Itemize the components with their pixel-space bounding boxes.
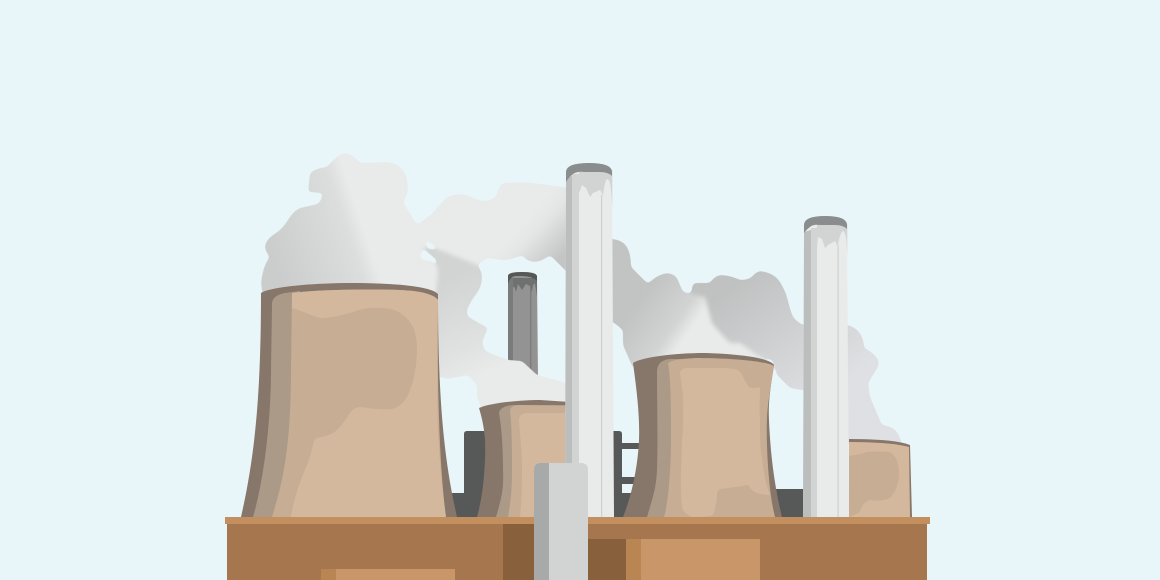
- door, right: [626, 539, 760, 580]
- smoke plumes: [261, 153, 902, 446]
- small cooling tower, right: [849, 439, 912, 517]
- smoke: big tower plume: [261, 153, 438, 298]
- foreground pillar: [534, 463, 588, 580]
- smoke: right plume between chimneys: [690, 271, 902, 446]
- small cooling tower, left: [477, 400, 570, 517]
- small dark chimney: [508, 272, 538, 380]
- smoke: rear plume behind small tower: [422, 248, 567, 412]
- medium cooling tower: [623, 353, 782, 517]
- smoke: plume above medium tower: [605, 237, 776, 368]
- door, left: [321, 569, 455, 580]
- large cooling tower: [241, 283, 457, 517]
- platform building: [225, 517, 930, 580]
- smoke: upper plume into chimney: [417, 182, 570, 275]
- dark buildings behind towers: [452, 431, 804, 517]
- first tall chimney: [565, 163, 614, 517]
- second tall chimney: [803, 216, 849, 517]
